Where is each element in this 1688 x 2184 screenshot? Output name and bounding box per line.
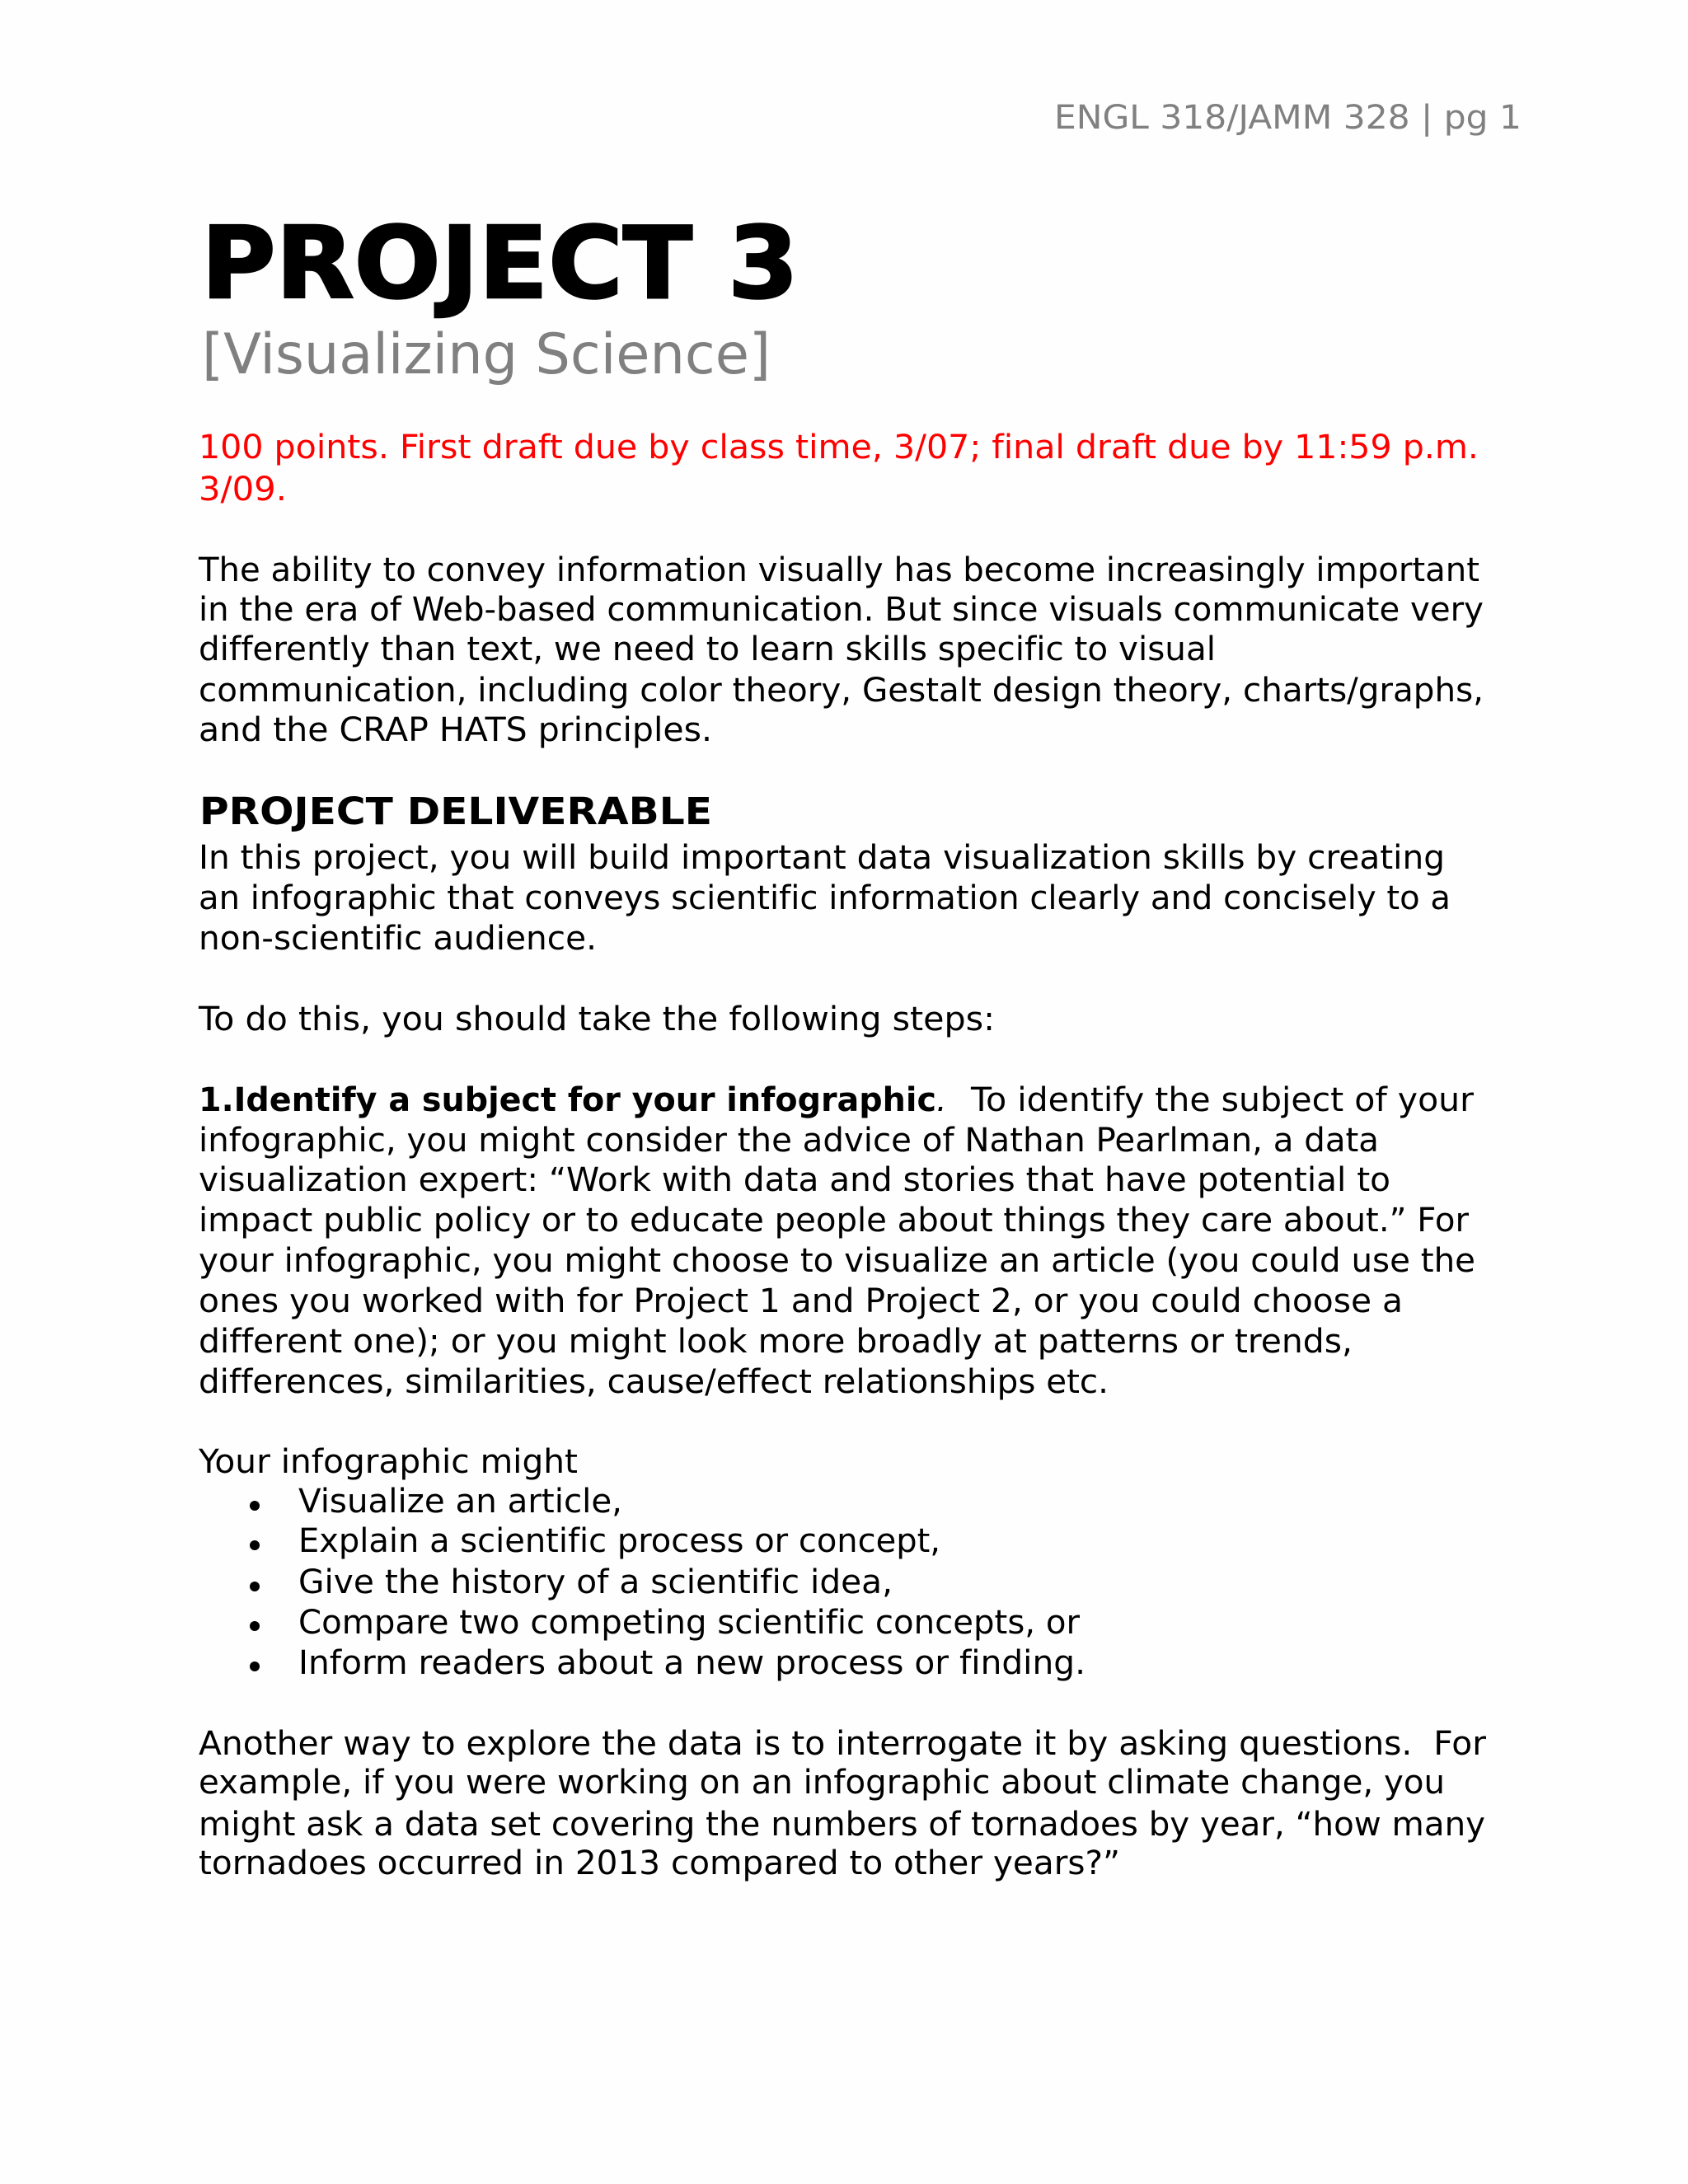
step 1 paragraph: visualization expert: “Work with data and stories that have potential to — [199, 1161, 1390, 1199]
closing paragraph: tornadoes occurred in 2013 compared to other years?” — [199, 1844, 1120, 1882]
deadline notice: 100 points. First draft due by class time, 3/07; final draft due by 11:59 p.m. — [199, 429, 1479, 466]
deliverable paragraph: In this project, you will build important data visualization skills by creating — [199, 839, 1445, 877]
intro paragraph: and the CRAP HATS principles. — [199, 711, 712, 749]
intro paragraph — [198, 551, 1484, 749]
step 1 paragraph: your infographic, you might choose to visualize an article (you could use the — [199, 1242, 1475, 1280]
step 1 paragraph: ones you worked with for Project 1 and Project 2, or you could choose a — [199, 1282, 1403, 1320]
bullet list: Visualize an article, — [298, 1483, 622, 1521]
list intro: Your infographic might — [198, 1443, 578, 1481]
deliverable paragraph: an infographic that conveys scientific information clearly and concisely to a — [199, 879, 1451, 917]
title: PROJECT 3 — [201, 207, 799, 321]
intro paragraph: differently than text, we need to learn skills specific to visual — [199, 630, 1216, 668]
closing paragraph — [199, 1725, 1487, 1882]
step 1 paragraph: differences, similarities, cause/effect relationships etc. — [199, 1363, 1109, 1401]
steps intro: To do this, you should take the following steps: — [198, 1001, 995, 1038]
intro paragraph: The ability to convey information visually has become increasingly important — [198, 551, 1479, 589]
step 1 paragraph: To identify the subject of your — [970, 1081, 1475, 1119]
bullet list — [250, 1483, 1085, 1682]
deadline notice — [199, 429, 1479, 509]
intro paragraph: in the era of Web-based communication. But since visuals communicate very — [199, 591, 1484, 629]
bullet list: Inform readers about a new process or finding. — [298, 1644, 1085, 1682]
step 1 paragraph: 1.Identify a subject for your infographic — [199, 1081, 936, 1119]
closing paragraph: Another way to explore the data is to interrogate it by asking questions. For — [199, 1725, 1487, 1763]
deliverable paragraph — [199, 839, 1451, 958]
intro paragraph: communication, including color theory, Gestalt design theory, charts/graphs, — [199, 672, 1484, 710]
heading: project deliverable: PROJECT DELIVERABLE — [199, 790, 712, 833]
step 1 paragraph — [199, 1081, 1475, 1401]
bullet list: Explain a scientific process or concept, — [298, 1522, 940, 1560]
step 1 paragraph: impact public policy or to educate people about things they care about.” For — [199, 1202, 1470, 1240]
subtitle: [Visualizing Science] — [202, 322, 771, 387]
closing paragraph: might ask a data set covering the numbers of tornadoes by year, “how many — [199, 1806, 1485, 1844]
bullet list: Give the history of a scientific idea, — [298, 1563, 893, 1601]
step 1 paragraph: . — [936, 1081, 947, 1119]
step 1 paragraph: infographic, you might consider the advice of Nathan Pearlman, a data — [199, 1122, 1379, 1160]
deadline notice: 3/09. — [199, 471, 287, 509]
bullet list: Compare two competing scientific concepts, or — [298, 1604, 1081, 1642]
closing paragraph: example, if you were working on an infographic about climate change, you — [199, 1764, 1445, 1802]
step 1 paragraph: different one); or you might look more broadly at patterns or trends, — [199, 1323, 1353, 1361]
page header: ENGL 318/JAMM 328 | pg 1 — [1054, 99, 1522, 137]
deliverable paragraph: non-scientific audience. — [199, 920, 597, 958]
